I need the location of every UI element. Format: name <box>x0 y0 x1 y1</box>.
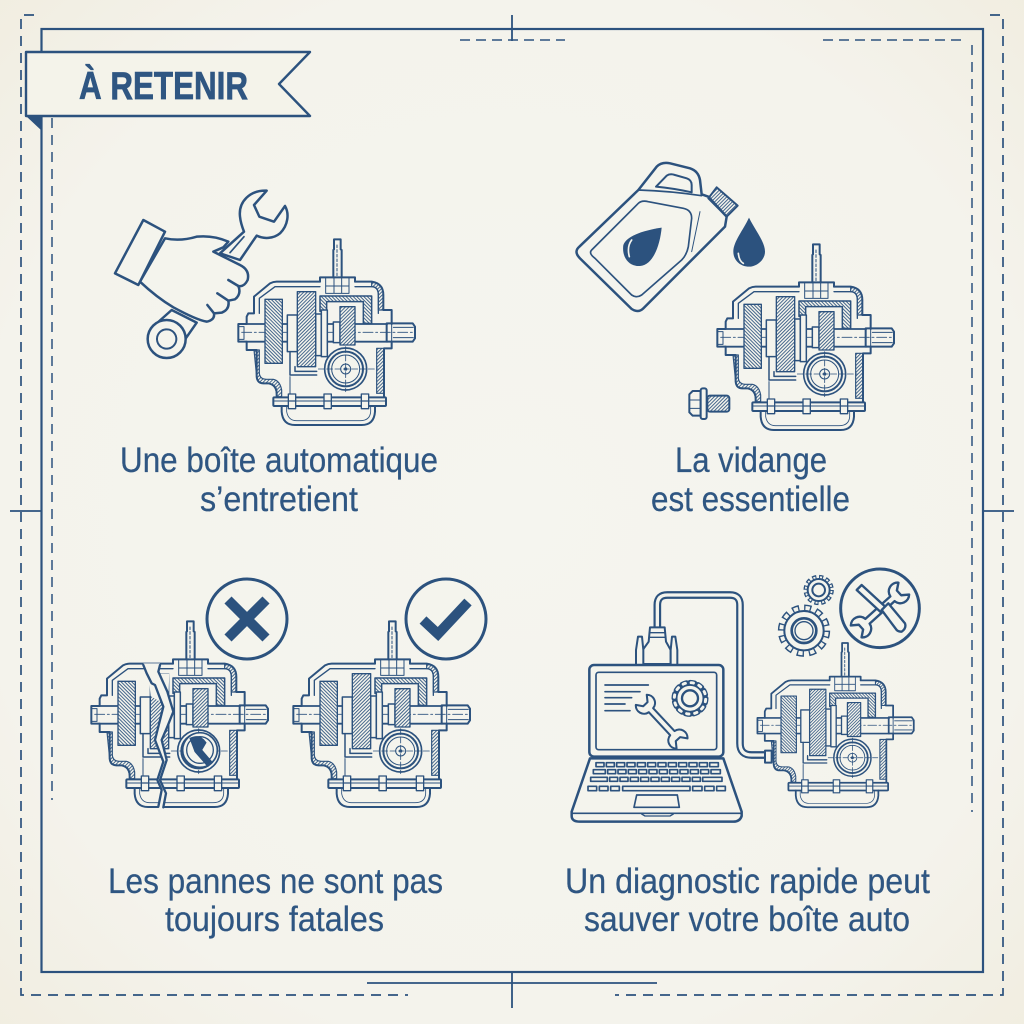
caption <box>651 441 850 519</box>
icon: good gearbox <box>293 621 470 807</box>
caption <box>565 862 930 939</box>
caption: Les pannes ne sont pas <box>108 862 443 901</box>
laptop screen wrench <box>634 693 689 750</box>
crack and damage <box>143 663 217 810</box>
icon: gearbox <box>757 643 914 807</box>
caption <box>120 441 438 519</box>
caption <box>108 862 443 939</box>
laptop screen <box>589 665 723 757</box>
badge: cross <box>207 579 287 659</box>
banner ribbon <box>26 52 310 116</box>
laptop base <box>572 758 742 822</box>
title banner <box>26 52 310 131</box>
keyboard <box>588 763 725 791</box>
icon: broken gearbox <box>91 621 268 810</box>
title: À RETENIR <box>79 64 248 108</box>
caption: Une boîte automatique <box>120 441 438 480</box>
panel: vidange <box>576 163 894 519</box>
diagnostic cable <box>657 595 772 763</box>
badge: tools <box>841 569 919 648</box>
caption: sauver votre boîte auto <box>584 900 910 939</box>
icon: gearbox <box>717 244 894 430</box>
caption: Un diagnostic rapide peut <box>565 862 930 901</box>
large gear <box>781 608 827 653</box>
icon: gearbox <box>238 239 415 425</box>
small gear <box>806 577 831 603</box>
icon: hand holding wrench <box>115 191 288 358</box>
panel: entretien <box>115 191 438 519</box>
icon: laptop with cable <box>572 595 772 822</box>
caption: La vidange <box>675 441 827 480</box>
caption: s’entretient <box>200 480 358 519</box>
badge: check <box>406 579 486 659</box>
icon: drain bolt <box>689 388 729 419</box>
banner fold <box>26 116 42 131</box>
icon: oil can and drops <box>576 163 765 311</box>
icon: gears <box>781 577 831 653</box>
panel: diagnostic <box>565 569 930 939</box>
diagnostic connector <box>636 627 677 664</box>
laptop screen gear <box>674 683 706 714</box>
caption: est essentielle <box>651 480 850 519</box>
caption: toujours fatales <box>165 900 384 939</box>
panel: pannes <box>91 579 486 939</box>
